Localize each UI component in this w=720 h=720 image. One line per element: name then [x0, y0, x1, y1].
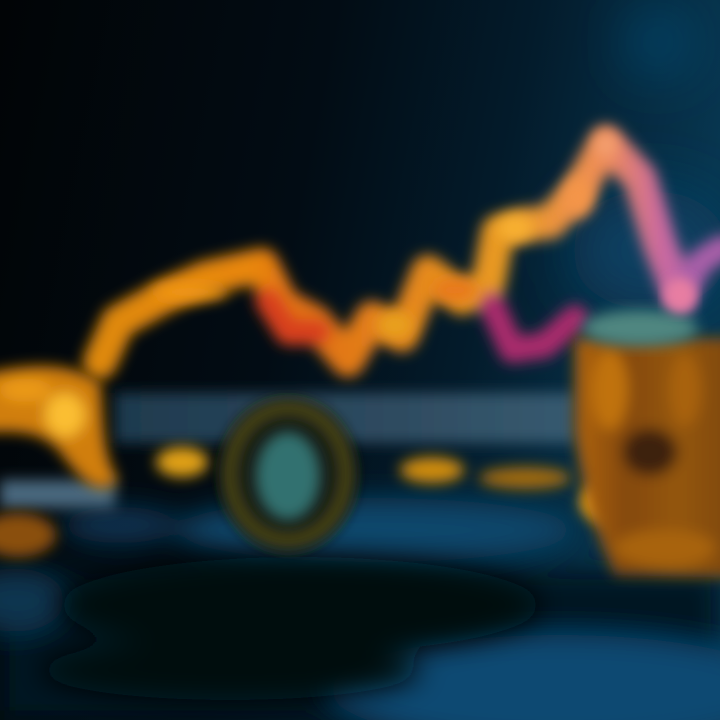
chart line: peak over stack	[666, 280, 694, 312]
left coin pile	[0, 366, 118, 557]
coin: dark backing	[220, 399, 356, 551]
chart line: bright highlights	[152, 133, 693, 339]
chart line: market trend	[100, 142, 720, 362]
foreground water: blue table surface	[0, 498, 720, 720]
coin: teal centre	[256, 432, 320, 520]
central round coin	[220, 399, 356, 551]
right coin stack	[575, 310, 720, 578]
background glow: upper right	[570, 18, 720, 310]
coin: olive gold ring	[230, 408, 346, 540]
coin stack: teal top	[582, 310, 698, 346]
horizontal grey-blue band	[0, 393, 575, 508]
coin stack: body	[575, 338, 720, 578]
dark dish in the foreground	[40, 557, 540, 700]
small glowing gold coins along the band	[156, 447, 640, 524]
